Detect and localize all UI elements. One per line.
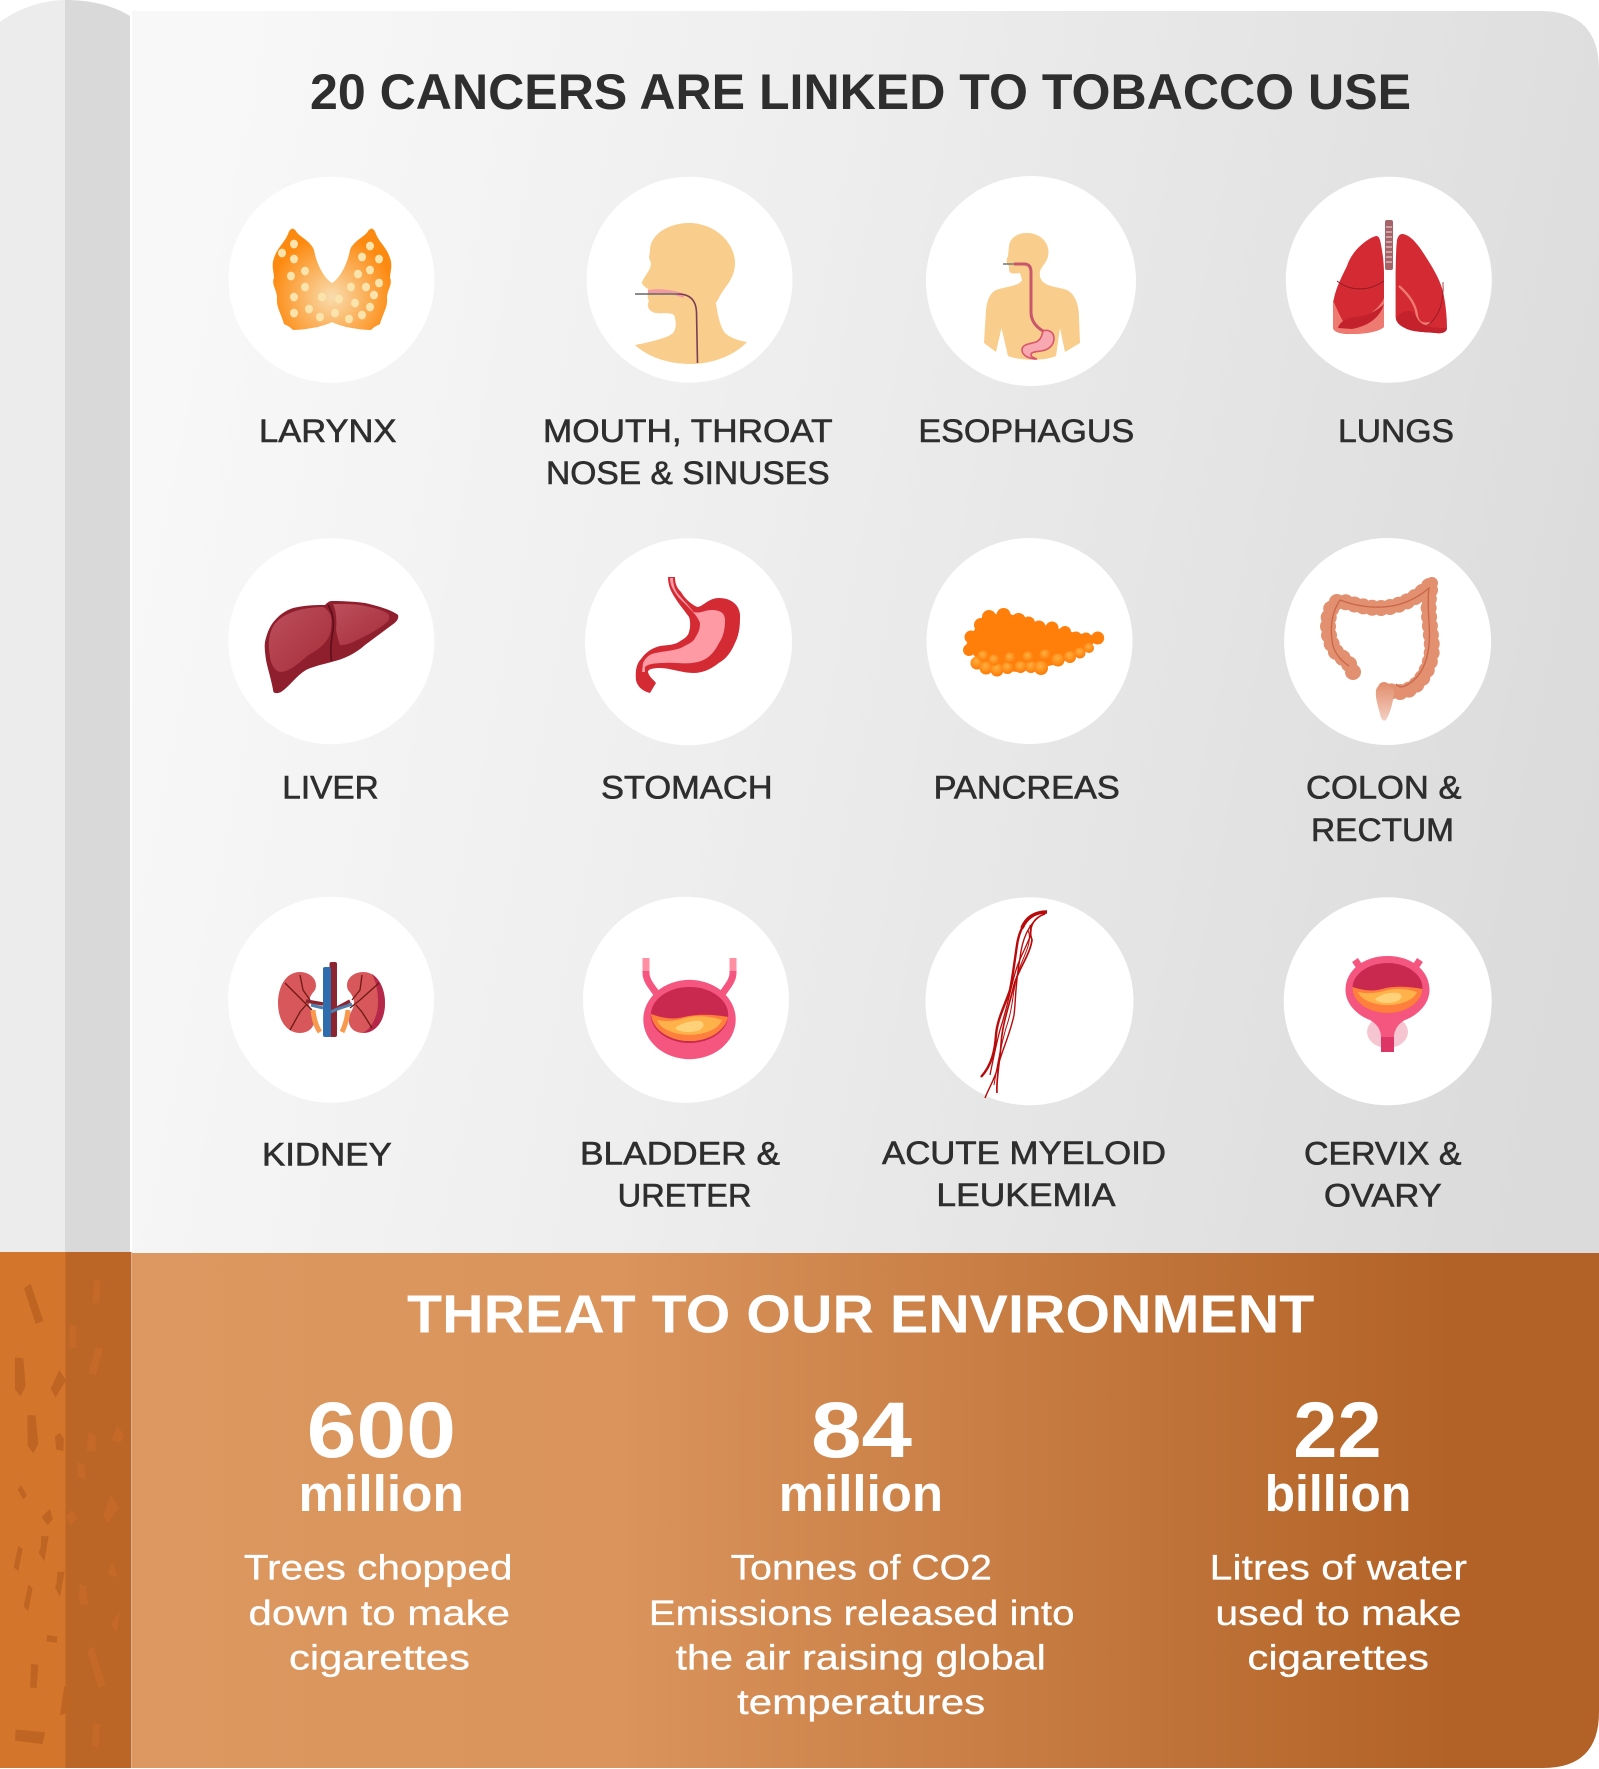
stat: 84 million tonnes of CO2: temperatures (737, 1683, 985, 1722)
icon: colon and rectum (1284, 538, 1491, 745)
label: bladder and ureter: BLADDER & (580, 1136, 780, 1172)
label: larynx: LARYNX (259, 413, 396, 449)
icon: cervix and ovary (1284, 897, 1492, 1105)
stat: 22 billion litres of water: cigarettes (1247, 1638, 1429, 1677)
icon: esophagus (926, 176, 1136, 386)
icon: stomach (585, 538, 792, 745)
icon: acute myeloid leukemia (926, 897, 1134, 1105)
stat: 600 million trees: million (298, 1465, 464, 1522)
label: cervix and ovary: OVARY (1324, 1178, 1442, 1214)
label: acute myeloid leukemia: ACUTE MYELOID (882, 1135, 1166, 1171)
stat: 84 million tonnes of CO2: Tonnes of CO2 (731, 1548, 992, 1587)
stat: 600 million trees: down to make (248, 1594, 510, 1633)
label: acute myeloid leukemia: LEUKEMIA (936, 1177, 1116, 1213)
label: pancreas: PANCREAS (934, 770, 1120, 806)
panel: environment background (132, 1253, 1599, 1768)
heading: threat to our environment: THREAT TO OUR ENVIRONMENT (407, 1285, 1314, 1345)
stat: 22 billion litres of water: used to make (1215, 1594, 1461, 1633)
label: bladder and ureter (580, 1136, 780, 1214)
label: liver: LIVER (282, 770, 379, 806)
stat: 22 billion litres of water: billion (1265, 1465, 1411, 1522)
stat: 22 billion litres of water: Litres of water (1210, 1548, 1467, 1587)
label: acute myeloid leukemia (882, 1135, 1166, 1213)
label: mouth, throat, nose and sinuses: NOSE & SINUSES (546, 455, 830, 491)
label: colon and rectum: COLON & (1306, 770, 1462, 806)
cigarette filter paper strip (0, 0, 130, 1252)
stat: 600 million trees (244, 1385, 512, 1677)
icon: larynx (228, 177, 434, 383)
label: cervix and ovary: CERVIX & (1304, 1136, 1462, 1172)
label: kidney: KIDNEY (262, 1137, 392, 1173)
stat: 600 million trees: 600 (307, 1385, 456, 1474)
label: colon and rectum: RECTUM (1311, 812, 1454, 848)
icon: bladder and ureter (583, 897, 789, 1103)
stat: 84 million tonnes of CO2: the air raising global (676, 1638, 1046, 1677)
label: lungs: LUNGS (1338, 413, 1454, 449)
icon: mouth and throat (586, 177, 792, 383)
title: 20 CANCERS ARE LINKED TO TOBACCO USE (310, 64, 1411, 120)
label: stomach: STOMACH (601, 770, 773, 806)
stat: 84 million tonnes of CO2 (649, 1385, 1074, 1722)
icon: pancreas (926, 538, 1132, 744)
panel: cancers background (132, 11, 1599, 1253)
stat: 84 million tonnes of CO2: Emissions released into (649, 1594, 1074, 1633)
stat: 22 billion litres of water (1210, 1385, 1467, 1677)
label: mouth, throat, nose and sinuses (543, 413, 833, 491)
icon: kidney (228, 897, 434, 1103)
stat: 22 billion litres of water: 22 (1293, 1385, 1382, 1474)
label: bladder and ureter: URETER (618, 1178, 752, 1214)
tobacco strip (0, 1252, 132, 1768)
label: colon and rectum (1306, 770, 1462, 848)
label: cervix and ovary (1304, 1136, 1462, 1214)
stat: 84 million tonnes of CO2: million (779, 1465, 943, 1522)
label: mouth, throat, nose and sinuses: MOUTH, THROAT (543, 413, 833, 449)
icon: liver (228, 538, 434, 744)
stat: 84 million tonnes of CO2: 84 (811, 1385, 912, 1474)
stat: 600 million trees: Trees chopped (244, 1548, 512, 1587)
label: esophagus: ESOPHAGUS (918, 413, 1134, 449)
icon: lungs (1286, 177, 1492, 383)
stat: 600 million trees: cigarettes (289, 1638, 470, 1677)
